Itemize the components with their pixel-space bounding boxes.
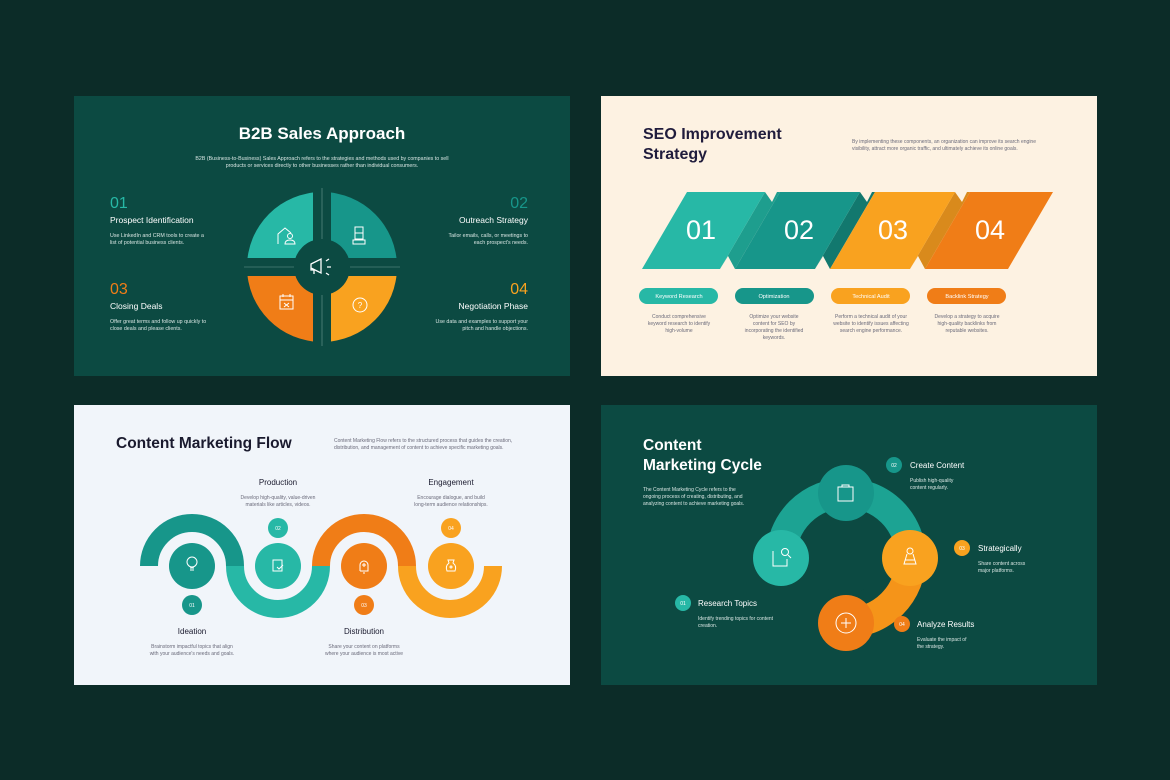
- description: analyzing content to achieve marketing goals.: [643, 501, 744, 507]
- step 03: [110, 281, 206, 332]
- chevron steps: 04: [975, 215, 1005, 245]
- title: Strategy: [643, 146, 707, 163]
- step labels: Develop high-quality, value-driven: [241, 495, 316, 501]
- number badges: 04: [448, 526, 454, 532]
- item 03: [954, 540, 1026, 574]
- pill labels: Optimization: [758, 294, 790, 300]
- step descriptions: Conduct comprehensive: [652, 314, 706, 320]
- step 03: Closing Deals: [110, 301, 162, 311]
- title: Marketing Cycle: [643, 457, 762, 474]
- icon: house person: [278, 228, 295, 244]
- item 03: 03: [959, 546, 965, 552]
- description: The Content Marketing Cycle refers to the: [643, 487, 736, 493]
- step descriptions: Perform a technical audit of your: [835, 314, 907, 320]
- panel: Content Marketing Cycle: [601, 405, 1097, 685]
- description: [334, 438, 512, 451]
- step descriptions: content for SEO by: [753, 321, 796, 327]
- item 03: Strategically: [978, 544, 1022, 553]
- step 01: Use LinkedIn and CRM tools to create a: [110, 233, 204, 239]
- item 02: [886, 457, 965, 491]
- step descriptions: reputable websites.: [945, 328, 989, 334]
- step 02: 02: [510, 195, 528, 212]
- description: [643, 487, 744, 507]
- icon: megaphone: [311, 259, 331, 275]
- step 02: Outreach Strategy: [459, 215, 529, 225]
- title: [643, 126, 782, 163]
- title: Content Marketing Flow: [116, 435, 293, 452]
- pie chart: [244, 188, 400, 346]
- step descriptions: search engine performance.: [840, 328, 902, 334]
- step 01: [110, 195, 204, 246]
- step descriptions: Optimize your website: [749, 314, 799, 320]
- item 04: Analyze Results: [917, 620, 974, 629]
- icon: calendar: [280, 294, 293, 309]
- item 01: Identify trending topics for content: [698, 616, 774, 622]
- chevron steps: 03: [878, 215, 908, 245]
- description: By implementing these components, an organization can improve its search engine: [852, 139, 1036, 145]
- description: visibility, attract more organic traffic, and ultimately achieve its online goals.: [852, 146, 1018, 152]
- step descriptions: incorporating the identified: [745, 328, 804, 334]
- panel: B2B Sales Approach: [74, 96, 570, 376]
- icon: question: [353, 298, 367, 312]
- description: distribution, and management of content to achieve specific marketing goals.: [334, 445, 504, 451]
- step descriptions: keyword research to identify: [648, 321, 711, 327]
- step 04: pitch and handle objections.: [462, 326, 528, 332]
- pill labels: [639, 288, 1006, 304]
- number badges: 01: [189, 603, 195, 609]
- item 02: Create Content: [910, 461, 965, 470]
- step 04: Use data and examples to support your: [436, 319, 528, 325]
- step labels: Encourage dialogue, and build: [417, 495, 485, 501]
- title: SEO Improvement: [643, 126, 782, 143]
- step descriptions: keywords.: [763, 335, 785, 341]
- step descriptions: website to identify issues affecting: [833, 321, 909, 327]
- step 03: 03: [110, 281, 128, 298]
- description: [852, 139, 1036, 152]
- item 01: 01: [680, 601, 686, 607]
- item 02: 02: [891, 463, 897, 469]
- icon: stand: [353, 227, 365, 244]
- item 04: 04: [899, 622, 905, 628]
- step labels: with your audience's needs and goals.: [150, 651, 234, 657]
- step labels: Engagement: [428, 478, 474, 487]
- step 04: 04: [510, 281, 528, 298]
- description: Content Marketing Flow refers to the structured process that guides the creation,: [334, 438, 512, 444]
- item 02: content regularly.: [910, 485, 948, 491]
- pill labels: Technical Audit: [852, 294, 890, 300]
- description: B2B (Business-to-Business) Sales Approach refers to the strategies and methods used by companies to sell: [195, 156, 449, 162]
- step 02: [449, 195, 529, 246]
- description: ongoing process of creating, distributing, and: [643, 494, 743, 500]
- step descriptions: high-quality backlinks from: [938, 321, 996, 327]
- step 01: Prospect Identification: [110, 215, 194, 225]
- description: products or services directly to other businesses rather than individual consumers.: [226, 163, 418, 169]
- title: Content: [643, 437, 702, 454]
- wave chart: [149, 523, 493, 609]
- step circles: [169, 543, 474, 589]
- step 02: each prospect's needs.: [474, 240, 528, 246]
- step labels: where your audience is most active: [325, 651, 403, 657]
- panel: Content Marketing Flow: [74, 405, 570, 685]
- item 01: [675, 595, 774, 629]
- step 01: list of potential business clients.: [110, 240, 184, 246]
- step 01: 01: [110, 195, 128, 212]
- item 02: Publish high-quality: [910, 478, 954, 484]
- item 04: the strategy.: [917, 644, 944, 650]
- step descriptions: [648, 314, 1000, 341]
- step labels: Ideation: [178, 627, 206, 636]
- step 03: close deals and please clients.: [110, 326, 182, 332]
- step labels: Distribution: [344, 627, 384, 636]
- step descriptions: high-volume: [665, 328, 693, 334]
- item 03: major platforms.: [978, 568, 1014, 574]
- description: [195, 156, 449, 169]
- chevron steps: 02: [784, 215, 814, 245]
- step labels: Production: [259, 478, 297, 487]
- chevron steps: [642, 192, 1053, 269]
- pill labels: Keyword Research: [655, 294, 703, 300]
- step 02: Tailor emails, calls, or meetings to: [449, 233, 528, 239]
- title: B2B Sales Approach: [239, 124, 405, 143]
- number badges: 03: [361, 603, 367, 609]
- item 04: Evaluate the impact of: [917, 637, 967, 643]
- step 03: Offer great terms and follow up quickly to: [110, 319, 206, 325]
- step 04: [436, 281, 528, 332]
- chevron steps: 01: [686, 215, 716, 245]
- step labels: Brainstorm impactful topics that align: [151, 644, 233, 650]
- item 04: [894, 616, 974, 650]
- pill labels: Backlink Strategy: [945, 294, 989, 300]
- step labels: Share your content on platforms: [328, 644, 400, 650]
- step descriptions: Develop a strategy to acquire: [934, 314, 1000, 320]
- cycle diagram: [753, 465, 938, 651]
- item 01: Research Topics: [698, 599, 757, 608]
- step 04: Negotiation Phase: [459, 301, 528, 311]
- number badges: 02: [275, 526, 281, 532]
- title: [643, 437, 762, 474]
- step labels: materials like articles, videos.: [245, 502, 311, 508]
- panel: SEO Improvement Strategy: [601, 96, 1097, 376]
- number badges: [182, 518, 461, 615]
- item 01: creation.: [698, 623, 717, 629]
- item 03: Share content across: [978, 561, 1026, 567]
- step labels: [150, 478, 488, 657]
- step labels: long-term audience relationships.: [414, 502, 488, 508]
- icon: question: ?: [358, 301, 363, 310]
